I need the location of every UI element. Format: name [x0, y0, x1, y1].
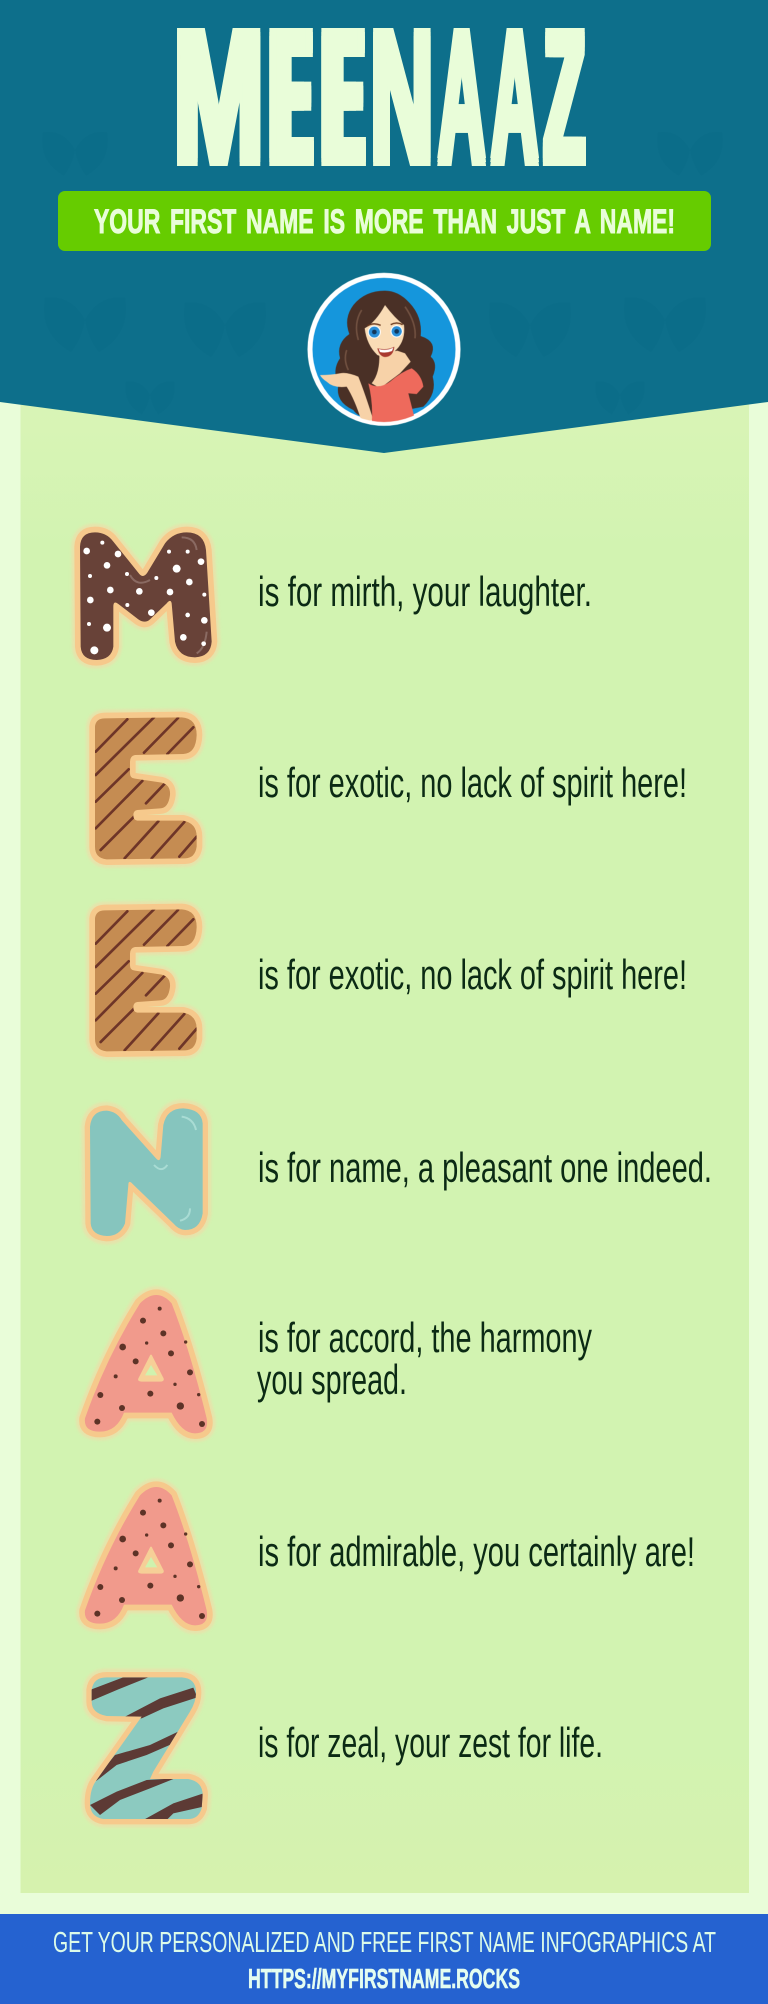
eyes: [367, 323, 403, 338]
tagline bar: [58, 191, 711, 251]
letter A row: [85, 1295, 592, 1433]
cookie letter E: [95, 717, 197, 859]
title: [173, 0, 586, 203]
line A, two lines: you spread.: [257, 1356, 407, 1403]
hair: [335, 291, 435, 417]
footer url: HTTPS://MYFIRSTNAME.ROCKS: [248, 1963, 520, 1994]
mouth: [377, 347, 394, 357]
second letter A row: [85, 1487, 695, 1625]
line A, two lines: [257, 1314, 592, 1403]
shirt: [368, 368, 423, 423]
neck and raised hand: [372, 351, 411, 388]
cookie letter M: [80, 532, 212, 660]
cookie letter A: [85, 1487, 207, 1625]
cookie letter E: [95, 909, 197, 1051]
avatar: woman in circle: [310, 275, 458, 423]
content panel: [20, 390, 749, 1893]
line A, two lines: is for accord, the harmony: [258, 1314, 592, 1361]
letter Z row: [90, 1677, 603, 1820]
footer: [0, 1914, 768, 2004]
cookie letter N: [90, 1108, 203, 1236]
letter E row: [95, 717, 687, 859]
line Z: is for zeal, your zest for life.: [258, 1719, 603, 1766]
letter M row: [80, 532, 592, 660]
arm and hand: [320, 373, 373, 422]
header banner: [0, 0, 768, 453]
line M: is for mirth, your laughter.: [258, 568, 592, 615]
letter N row: [90, 1108, 712, 1236]
cookie letter Z: [90, 1677, 203, 1820]
face: [365, 305, 404, 356]
second letter E row: [95, 909, 687, 1051]
cookie letter A: [85, 1295, 207, 1433]
